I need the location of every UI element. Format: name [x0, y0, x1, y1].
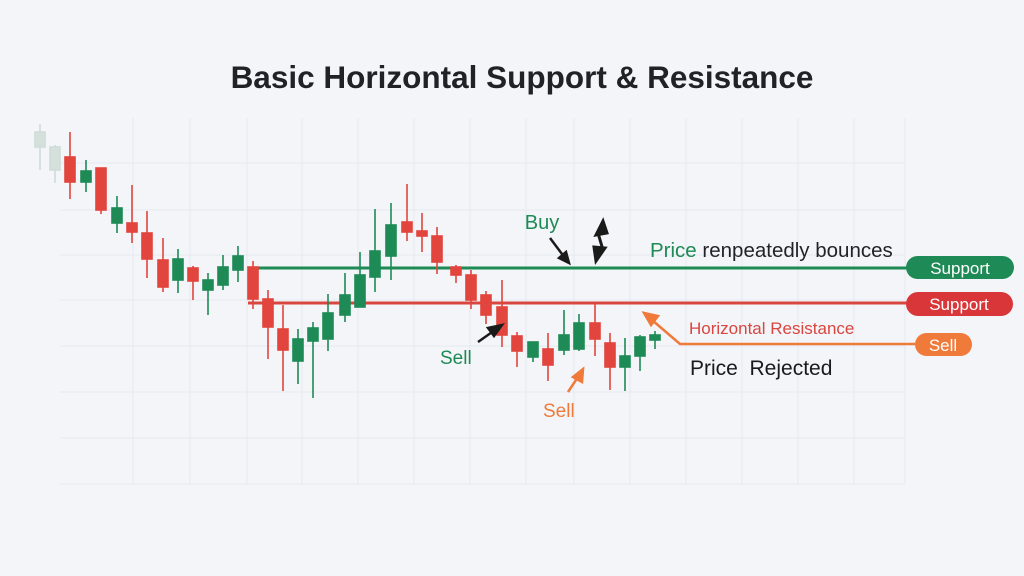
- pill: sell orange: Sell: [929, 336, 957, 355]
- label: sell orange: Sell: [543, 401, 575, 422]
- pill: support green: [906, 256, 1014, 279]
- pill: sell orange: [915, 333, 972, 356]
- arrow: sell black: [478, 325, 502, 342]
- pill: support green: Support: [930, 259, 990, 278]
- title: Basic Horizontal Support & Resistance: [231, 59, 813, 95]
- candlestick chart: [35, 124, 660, 398]
- arrow: buy: [550, 238, 569, 263]
- icon: double arrow: [594, 221, 607, 261]
- label: Price Rejected: Price Rejected: [690, 357, 832, 380]
- pill: support red: Support: [929, 295, 989, 314]
- label: price repeatedly bounces: Price renpeatedly bounces: [650, 239, 893, 262]
- support line green: [248, 266, 910, 270]
- arrow: orange to sell pill: [644, 313, 915, 344]
- label: sell green: Sell: [440, 348, 472, 369]
- label: Horizontal Resistance: Horizontal Resistance: [689, 319, 854, 338]
- pill: support red: [906, 292, 1013, 316]
- label: Buy: Buy: [525, 212, 559, 234]
- resistance line red: [248, 302, 910, 304]
- arrow: sell orange: [568, 369, 583, 392]
